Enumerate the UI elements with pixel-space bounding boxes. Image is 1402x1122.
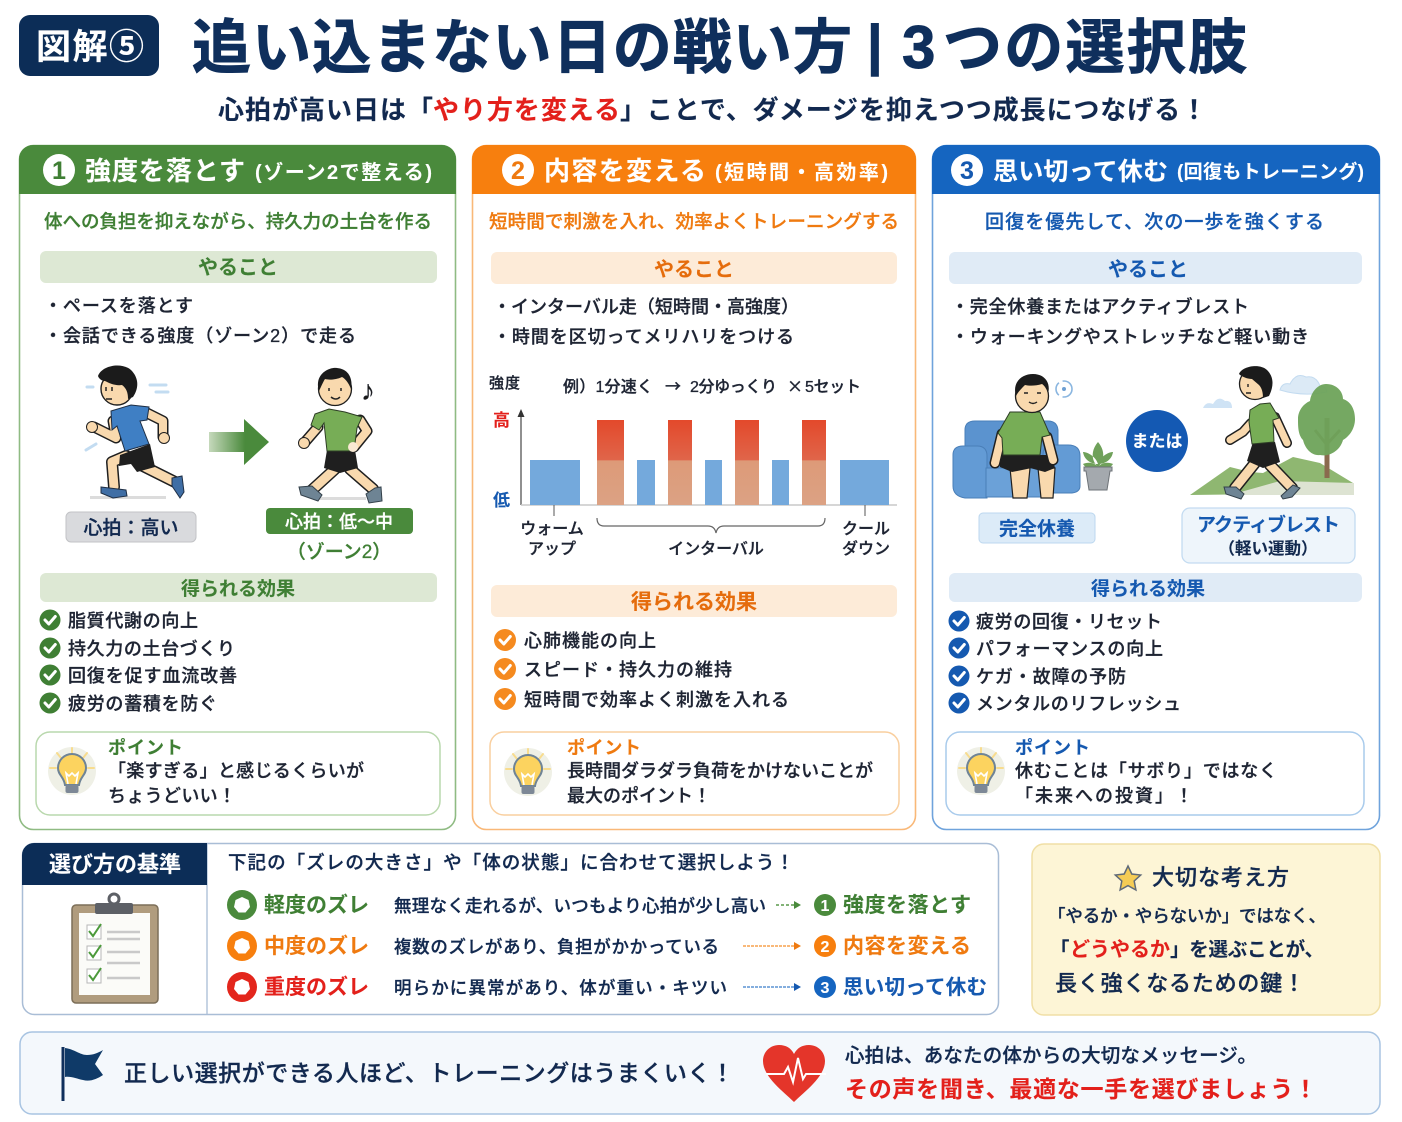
panel 2 lead text: 短時間で刺激を入れ、効率よくトレーニングする xyxy=(489,211,899,232)
mindset heading: 大切な考え方 xyxy=(1152,865,1289,890)
row: mild xyxy=(227,890,971,920)
panel 1 heading: (ゾーン2で整える) xyxy=(255,161,432,184)
icon: flag xyxy=(63,1047,103,1101)
panel 2 point box: 最大のポイント！ xyxy=(567,786,711,806)
panel 1 lead text: 体への負担を抑えながら、持久力の土台を作る xyxy=(44,211,432,232)
panel: 思い切って休む xyxy=(932,145,1380,830)
label: 完全休養 xyxy=(979,513,1095,543)
panel 3 action list: ・ウォーキングやストレッチなど軽い動き xyxy=(951,327,1309,347)
panel 3 effects heading xyxy=(949,573,1362,602)
panel: 強度を落とす xyxy=(19,145,456,830)
panel 1 point box: ちょうどいい！ xyxy=(108,786,236,806)
panel 1 effects list: 持久力の土台づくり xyxy=(68,639,235,659)
illustration: walking in nature xyxy=(1190,366,1355,499)
criteria heading: 選び方の基準 xyxy=(49,852,181,877)
illustration: tired runner xyxy=(86,365,184,499)
row: moderate xyxy=(227,931,971,961)
chart: interval intensity: 例）1分速く xyxy=(563,378,653,396)
row: mild: 無理なく走れるが、いつもより心拍が少し高い xyxy=(394,896,766,916)
label: heart rate low to medium: 心拍：低〜中 xyxy=(285,512,393,532)
panel 1 effects list xyxy=(40,610,237,714)
panel 3 やること heading xyxy=(949,252,1362,284)
title: つの選択肢 xyxy=(943,15,1247,81)
panel 3 effects heading: 得られる効果 xyxy=(1091,578,1205,600)
banner left text: 正しい選択ができる人ほど、トレーニングはうまくいく！ xyxy=(124,1060,734,1086)
banner right text: その声を聞き、最適な一手を選びましょう！ xyxy=(845,1076,1317,1102)
icon: clipboard xyxy=(72,894,158,1003)
chart: interval intensity xyxy=(489,373,897,558)
mindset text: 「 xyxy=(1050,939,1070,961)
row: mild: 軽度のズレ xyxy=(264,893,369,917)
panel 2 point box xyxy=(490,732,899,815)
mindset text: 「やるか・やらないか」ではなく、 xyxy=(1048,906,1326,926)
label: heart rate high xyxy=(66,512,196,542)
chart: interval intensity: ダウン xyxy=(842,539,890,558)
chart: interval intensity: アップ xyxy=(528,540,576,558)
row: mild: 1 xyxy=(821,898,830,915)
panel 3 lead text: 回復を優先して、次の一歩を強くする xyxy=(985,211,1324,233)
panel 2 effects list: 短時間で効率よく刺激を入れる xyxy=(524,690,789,710)
illustration: relaxed runner xyxy=(298,368,382,503)
chart: interval intensity: 5セット xyxy=(805,379,861,396)
panel 1 point box: ポイント xyxy=(108,737,183,758)
row: severe xyxy=(227,972,987,1002)
panel: selection criteria xyxy=(22,843,998,1015)
icon: star xyxy=(1115,866,1141,890)
panel 2 effects heading: 得られる効果 xyxy=(631,591,757,614)
panel: 内容を変える xyxy=(472,145,916,830)
mindset text xyxy=(1048,906,1326,996)
panel 1 effects heading: 得られる効果 xyxy=(181,578,295,600)
panel 3 action list xyxy=(951,296,1309,347)
badge: または: または xyxy=(1132,432,1182,451)
chart: interval intensity: 強度 xyxy=(489,375,520,392)
chart: interval intensity: ウォーム xyxy=(520,520,584,538)
icon: potted plant xyxy=(1083,442,1113,490)
panel 1 point box: 「楽すぎる」と感じるくらいが xyxy=(108,760,364,781)
panel 3 point box xyxy=(946,732,1364,815)
panel 3 action list: ・完全休養またはアクティブレスト xyxy=(951,296,1249,317)
panel 2 heading: 2 xyxy=(511,157,525,185)
panel 2 heading: 内容を変える xyxy=(544,156,706,186)
panel 2 action list xyxy=(493,297,799,347)
panel 3 heading: 3 xyxy=(960,157,974,185)
panel 1 heading: 1 xyxy=(52,157,66,185)
panel 2 effects heading xyxy=(491,585,897,617)
subtitle: やり方を変える xyxy=(433,95,620,125)
panel 1 やること heading: やること xyxy=(198,256,278,279)
chart: interval intensity: 高 xyxy=(493,410,510,430)
row: moderate: 2 xyxy=(821,939,830,956)
panel 2 heading xyxy=(502,154,888,186)
panel 1 action list: ・会話できる強度（ゾーン2）で走る xyxy=(44,326,356,346)
panel 3 effects list: 疲労の回復・リセット xyxy=(976,612,1162,632)
row: moderate: 中度のズレ xyxy=(264,934,369,958)
row: moderate: 複数のズレがあり、負担がかかっている xyxy=(394,937,719,957)
panel 1 heading: 強度を落とす xyxy=(85,156,245,186)
panel 3 heading xyxy=(951,154,1364,186)
badge: または xyxy=(1126,410,1188,472)
title: | xyxy=(867,13,883,77)
panel 1 action list xyxy=(44,296,356,346)
panel 1 effects list: 回復を促す血流改善 xyxy=(68,666,237,686)
row: mild: 強度を落とす xyxy=(843,894,971,917)
panel 2 effects list: スピード・持久力の維持 xyxy=(524,660,732,680)
label: アクティブレスト xyxy=(1182,508,1355,563)
panel 2 やること heading: やること xyxy=(654,258,734,281)
panel 3 やること heading: やること xyxy=(1108,258,1188,281)
criteria heading xyxy=(22,843,207,885)
panel 2 action list: ・インターバル走（短時間・高強度） xyxy=(493,297,799,317)
panel 1 effects list: 脂質代謝の向上 xyxy=(68,611,198,631)
chart: interval intensity: クール xyxy=(842,520,890,538)
label: heart rate low to medium xyxy=(266,508,413,563)
label: heart rate low to medium: （ゾーン2） xyxy=(287,541,391,563)
row: severe: 思い切って休む xyxy=(843,976,987,999)
subtitle: 心拍が高い日は「 xyxy=(218,95,433,125)
icon: heart with pulse xyxy=(763,1045,826,1102)
subtitle xyxy=(218,95,1207,125)
illustration: resting on sofa xyxy=(953,374,1113,498)
panel 3 effects list: パフォーマンスの向上 xyxy=(976,639,1163,659)
panel: important mindset xyxy=(1032,844,1380,1015)
chart: interval intensity: 低 xyxy=(493,491,510,510)
chart: interval intensity: 2分ゆっくり xyxy=(690,378,777,396)
title: 追い込まない日の戦い方 xyxy=(192,15,852,81)
panel 3 point box: ポイント xyxy=(1015,737,1090,758)
panel 1 action list: ・ペースを落とす xyxy=(44,296,193,316)
label: アクティブレスト: アクティブレスト xyxy=(1197,513,1340,536)
badge: 図解5 xyxy=(19,15,159,76)
panel 3 effects list: ケガ・故障の予防 xyxy=(976,667,1126,687)
row: severe: 3 xyxy=(821,980,830,997)
panel 1 やること heading xyxy=(40,251,437,283)
panel 3 point box: 「未来への投資」！ xyxy=(1015,786,1193,806)
banner: bottom message xyxy=(20,1032,1380,1114)
label: heart rate high: 心拍：高い xyxy=(83,517,179,539)
chart: interval intensity: インターバル xyxy=(668,540,764,558)
panel 3 heading: 思い切って休む xyxy=(993,158,1168,186)
row: severe: 明らかに異常があり、体が重い・キツい xyxy=(394,978,727,998)
panel 2 effects list: 心肺機能の向上 xyxy=(524,631,656,651)
panel 3 effects list: メンタルのリフレッシュ xyxy=(976,694,1181,714)
badge: 図解5: 図解⑤ xyxy=(36,28,144,67)
banner right text xyxy=(845,1045,1317,1102)
panel 3 heading: (回復もトレーニング) xyxy=(1177,160,1364,183)
panel 1 effects heading xyxy=(40,573,437,602)
chart: interval intensity: × xyxy=(787,373,803,397)
subtitle: 」ことで、ダメージを抑えつつ成長につなげる！ xyxy=(620,95,1207,125)
panel 2 action list: ・時間を区切ってメリハリをつける xyxy=(493,327,794,347)
label: アクティブレスト: （軽い運動） xyxy=(1218,539,1318,558)
panel 3 point box: 休むことは「サボり」ではなく xyxy=(1015,761,1277,781)
mindset text: 」を選ぶことが、 xyxy=(1170,938,1324,961)
chart: interval intensity: → xyxy=(665,373,681,397)
panel 2 やること heading xyxy=(491,252,897,284)
label: 完全休養: 完全休養 xyxy=(999,518,1075,540)
arrow: to zone 2 xyxy=(209,419,269,465)
row: moderate: 内容を変える xyxy=(843,935,971,958)
panel 2 heading: (短時間・高効率) xyxy=(715,161,888,184)
panel 1 effects list: 疲労の蓄積を防ぐ xyxy=(68,694,217,714)
title: 3 xyxy=(902,14,935,81)
mindset text: どうやるか xyxy=(1070,938,1170,961)
title xyxy=(192,13,1247,81)
panel 2 point box: ポイント xyxy=(567,737,641,758)
criteria lead text: 下記の「ズレの大きさ」や「体の状態」に合わせて選択しよう！ xyxy=(228,852,794,873)
panel 2 effects list xyxy=(494,629,789,710)
panel 2 point box: 長時間ダラダラ負荷をかけないことが xyxy=(567,760,873,781)
panel 3 effects list xyxy=(948,610,1181,714)
panel 1 point box xyxy=(36,732,440,815)
mindset text: 長く強くなるための鍵！ xyxy=(1055,971,1305,996)
banner right text: 心拍は、あなたの体からの大切なメッセージ。 xyxy=(845,1045,1257,1067)
row: severe: 重度のズレ xyxy=(264,975,369,999)
panel 1 heading xyxy=(43,154,432,186)
icon: music note: ♪ xyxy=(361,375,375,406)
